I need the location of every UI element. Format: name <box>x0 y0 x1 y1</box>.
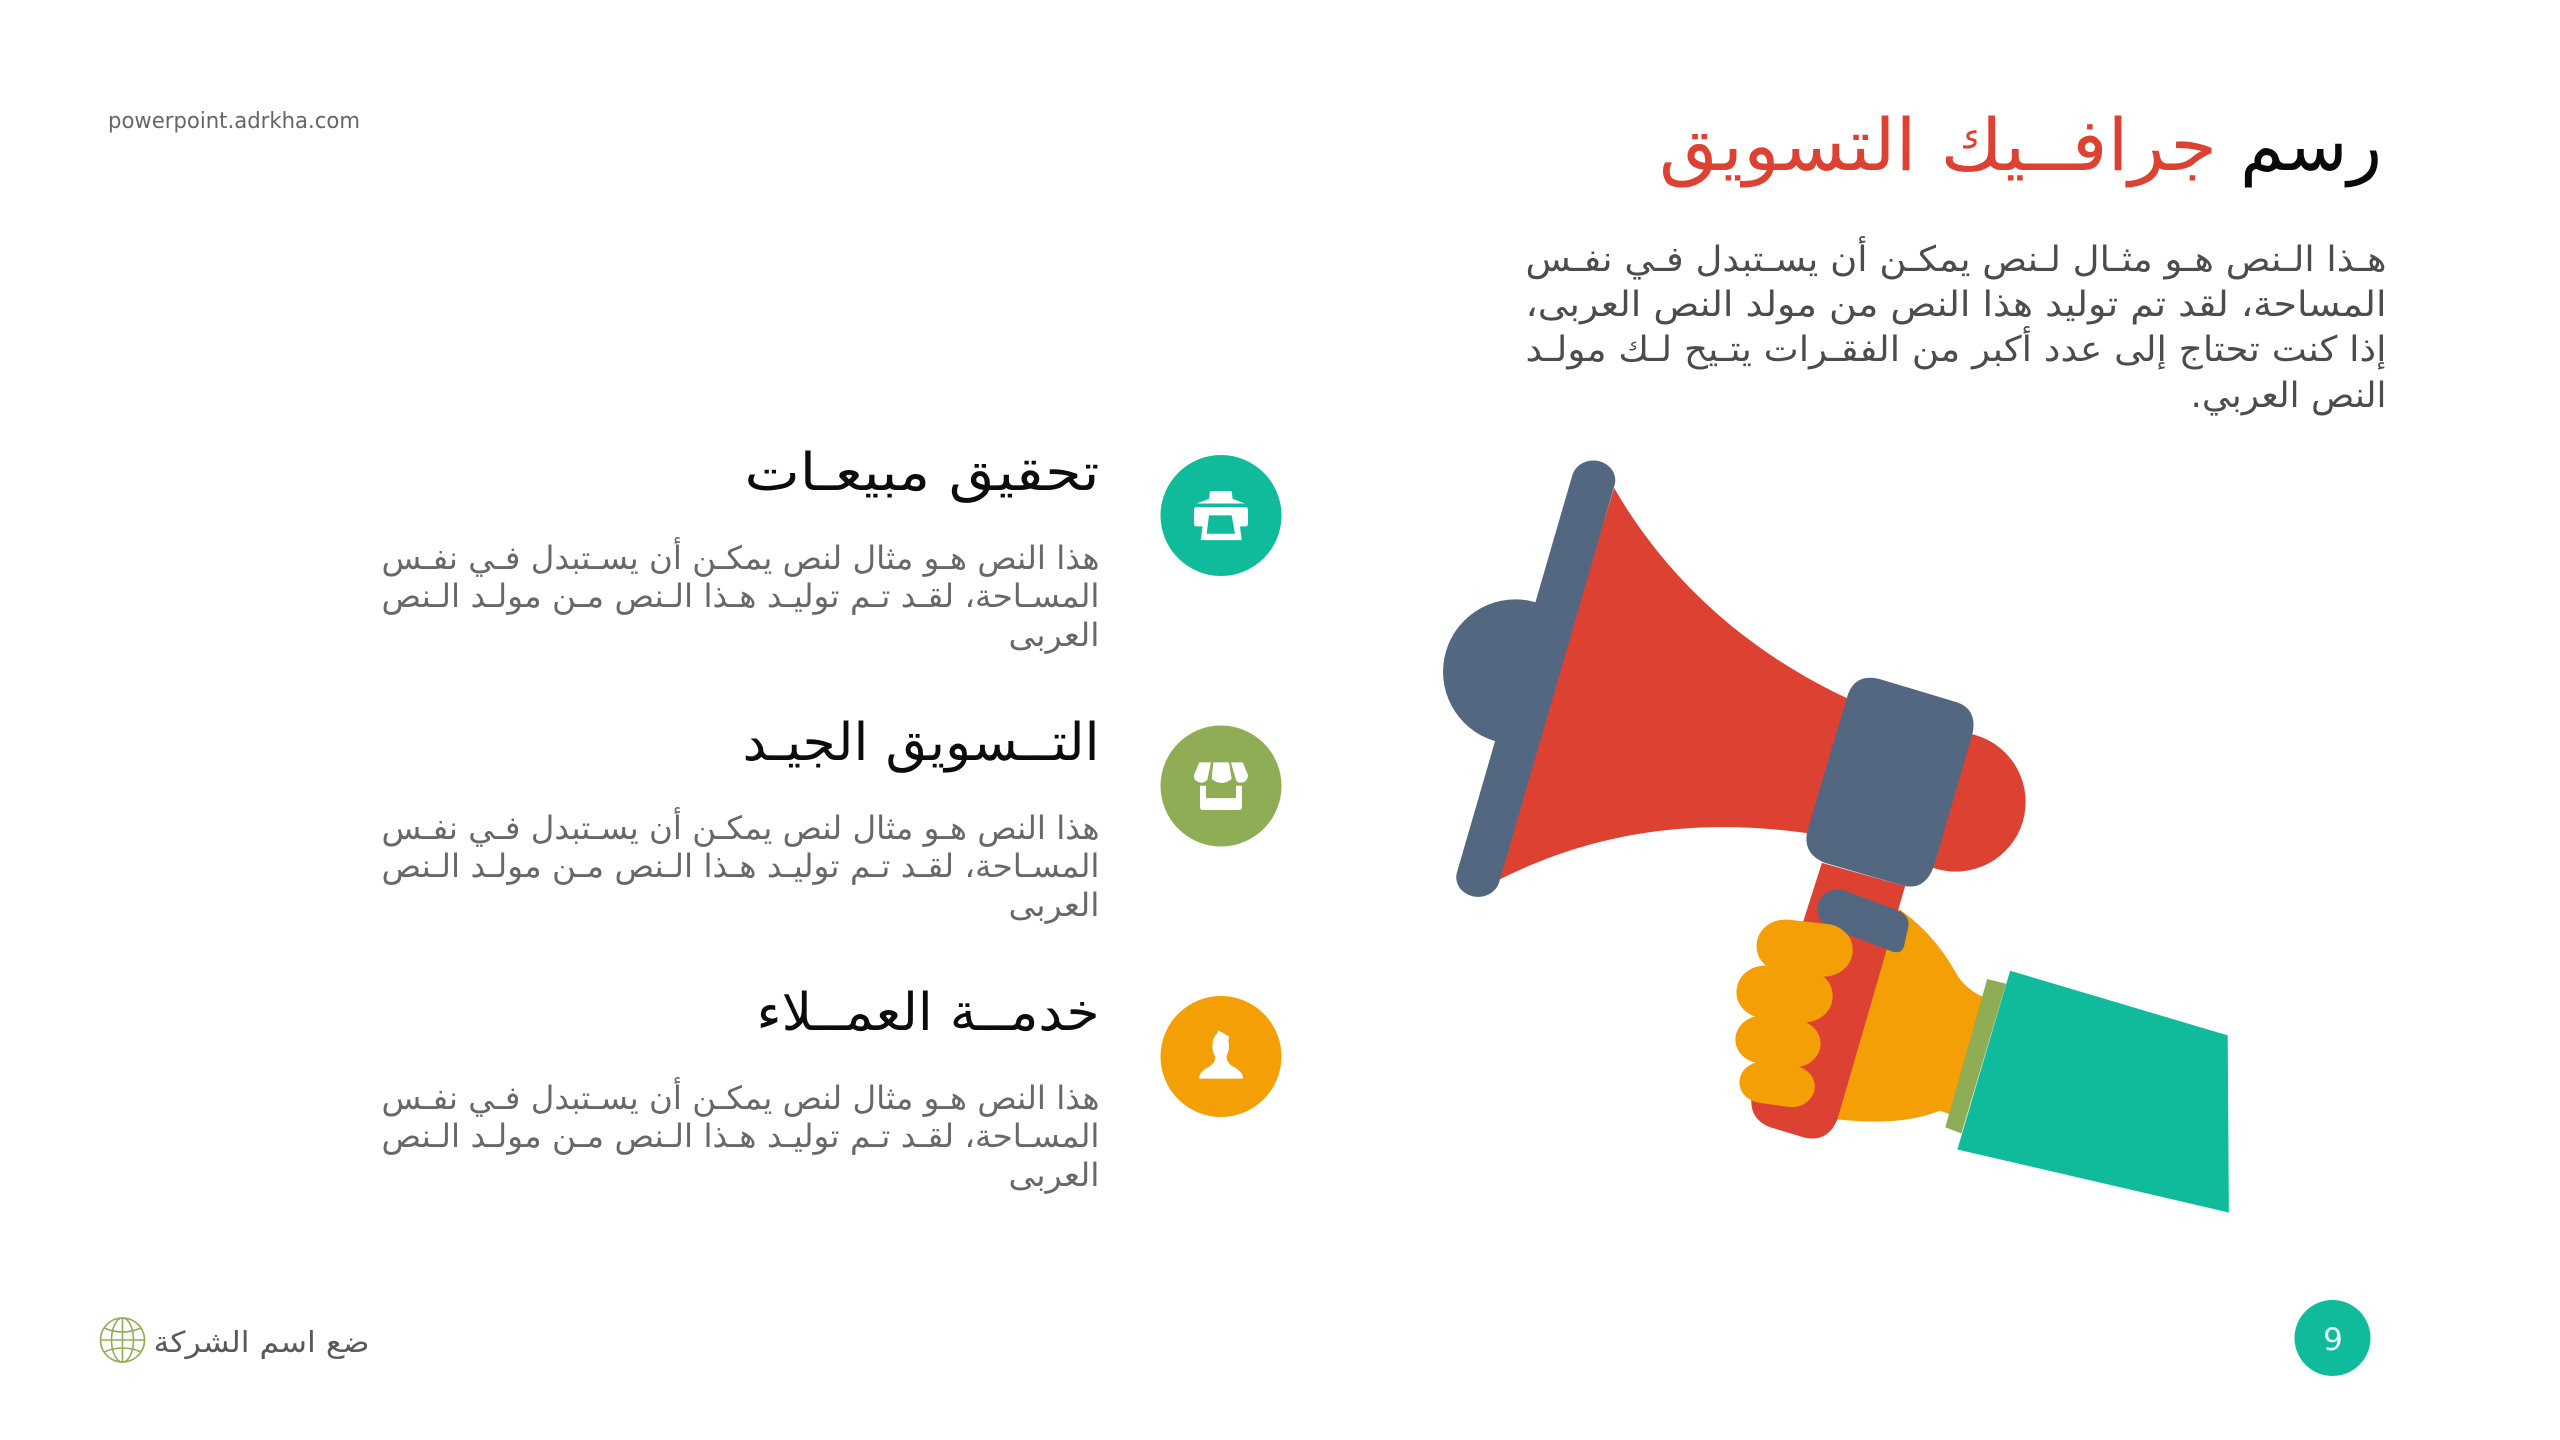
item 2: good marketing <box>382 713 1282 924</box>
intro paragraph: إذا كنت تحتاج إلى عدد أكبر من الفقـرات يتـيح لـك مولـد <box>1526 326 2386 370</box>
item 1 body text: العربى <box>1008 616 1100 654</box>
teal sleeve <box>1957 971 2229 1212</box>
palm <box>1830 909 1988 1122</box>
red horn <box>1495 488 1853 882</box>
handle <box>1751 863 1905 1139</box>
website label: powerpoint.adrkha.com <box>108 109 360 134</box>
intro paragraph: هـذا الـنص هـو مثـال لـنص يمكـن أن يسـتبدل فـي نفـس <box>1526 236 2386 280</box>
intro paragraph: المساحة، لقد تم توليد هذا النص من مولد النص العربى، <box>1526 285 2386 325</box>
item 3 body text: المسـاحة، لقـد تـم توليـد هـذا الـنص مـن مولـد الـنص <box>382 1117 1100 1155</box>
title: رسم <box>2240 103 2382 188</box>
footer: company name <box>100 1318 370 1362</box>
item 1 body text <box>382 537 1100 654</box>
item 2 body text: هذا النص هـو مثال لنص يمكـن أن يسـتبدل فـي نفـس <box>382 807 1100 847</box>
item 3: customer service <box>382 983 1282 1194</box>
icon: person <box>1160 996 1282 1117</box>
intro paragraph <box>1526 236 2386 416</box>
green cuff <box>1945 979 2006 1133</box>
collar <box>1806 678 1974 887</box>
item 1: sales <box>382 443 1282 654</box>
icon: globe <box>100 1318 144 1362</box>
icon: printer <box>1160 455 1282 576</box>
intro paragraph: النص العربي. <box>2190 376 2386 416</box>
company name text: ضع اسم الشركة <box>154 1325 370 1360</box>
item 2 heading: التــسويق الجيـد <box>742 713 1100 773</box>
item 1 heading: تحقيق مبيعـات <box>744 443 1100 503</box>
icon: storefront <box>1160 726 1282 846</box>
item 3 body text: العربى <box>1008 1156 1100 1194</box>
strap <box>1817 890 1909 952</box>
item 3 body text <box>382 1077 1100 1194</box>
item 3 heading: خدمــة العمــلاء <box>756 983 1100 1043</box>
title: جرافــيك التسويق <box>1659 103 2217 188</box>
back cap of megaphone <box>1443 599 1588 744</box>
item 2 body text: المسـاحة، لقـد تـم توليـد هـذا الـنص مـن مولـد الـنص <box>382 847 1100 885</box>
item 1 body text: هذا النص هـو مثال لنص يمكـن أن يسـتبدل فـي نفـس <box>382 537 1100 577</box>
item 2 body text: العربى <box>1008 886 1100 924</box>
fingers <box>1732 917 1856 1110</box>
page number badge: 9 <box>2323 1322 2343 1358</box>
horn rim <box>1478 480 1593 877</box>
illustration: megaphone in hand <box>1443 480 2229 1212</box>
page number badge <box>2294 1300 2370 1376</box>
item 3 body text: هذا النص هـو مثال لنص يمكـن أن يسـتبدل فـي نفـس <box>382 1077 1100 1117</box>
rear red dome <box>1886 732 2026 872</box>
item 1 body text: المسـاحة، لقـد تـم توليـد هـذا الـنص مـن مولـد الـنص <box>382 577 1100 615</box>
item 2 body text <box>382 807 1100 924</box>
